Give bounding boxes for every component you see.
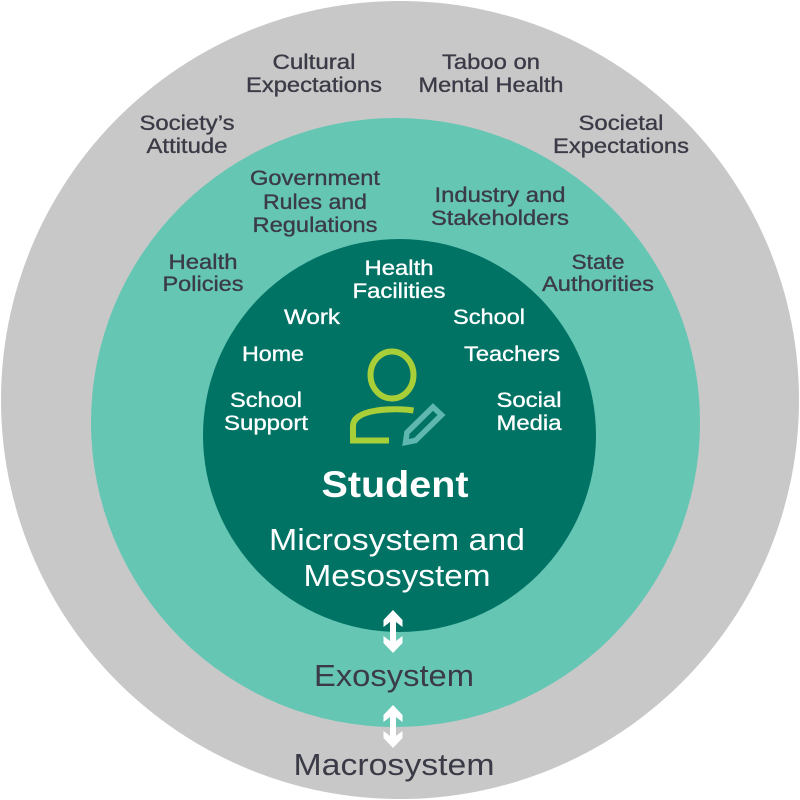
label: Cultural Expectations: [246, 51, 382, 97]
label: Societal Expectations: [553, 112, 689, 158]
label: Societal Expectations: Societal: [578, 112, 664, 135]
label: Taboo on Mental Health: Taboo on: [442, 51, 540, 74]
label: Social Media: Social: [496, 389, 562, 412]
arrow: micro to exo: [384, 610, 402, 653]
label: School Support: [224, 389, 308, 435]
label: State Authorities: Authorities: [542, 273, 654, 296]
heading: Microsystem and Mesosystem: Mesosystem: [304, 558, 490, 593]
label: Health Facilities: Health: [364, 257, 434, 280]
label: Societal Expectations: Expectations: [553, 135, 689, 158]
label: Society's Attitude: Society’s: [140, 112, 234, 135]
heading: Microsystem and Mesosystem: [269, 522, 525, 593]
icon: student shoulders: [353, 409, 414, 440]
label: Taboo on Mental Health: [418, 51, 564, 97]
heading: Exosystem: Exosystem: [314, 658, 474, 693]
heading: Macrosystem: Macrosystem: [294, 747, 494, 782]
label: Government Rules and Regulations: Regulations: [252, 214, 378, 237]
label: Home: Home: [242, 343, 304, 366]
label: School Support: Support: [224, 412, 308, 435]
label: Government Rules and Regulations: Government: [250, 167, 380, 190]
heading: Microsystem and Mesosystem: Microsystem and: [269, 522, 525, 557]
label: Teachers: Teachers: [464, 343, 560, 366]
label: State Authorities: State: [572, 251, 624, 274]
label: Cultural Expectations: Cultural: [272, 51, 356, 74]
panel: microsystem and mesosystem circle: [203, 239, 596, 632]
heading: Student: Student: [322, 464, 468, 505]
label: Society's Attitude: Attitude: [146, 135, 228, 158]
label: Social Media: [496, 389, 562, 435]
label: Cultural Expectations: Expectations: [246, 74, 382, 97]
label: School Support: School: [230, 389, 302, 412]
label: Health Facilities: Facilities: [352, 280, 446, 303]
label: Taboo on Mental Health: Mental Health: [418, 74, 564, 97]
macrosystem labels: [140, 51, 689, 158]
label: Health Facilities: [352, 257, 446, 303]
label: Health Policies: Health: [168, 251, 238, 274]
label: Industry and Stakeholders: Industry and: [434, 184, 566, 207]
label: Health Policies: [162, 251, 244, 296]
label: Society's Attitude: [140, 112, 234, 158]
label: Work: Work: [284, 306, 341, 329]
label: School: School: [453, 306, 525, 329]
exosystem labels: [162, 167, 654, 296]
icon: pencil: [406, 407, 442, 442]
label: State Authorities: [542, 251, 654, 296]
label: Health Policies: Policies: [162, 273, 244, 296]
label: Government Rules and Regulations: [250, 167, 380, 237]
icon: student with pencil: [353, 352, 442, 442]
label: Industry and Stakeholders: [431, 184, 569, 230]
label: Government Rules and Regulations: Rules and: [263, 191, 367, 214]
label: Social Media: Media: [496, 412, 562, 435]
label: Industry and Stakeholders: Stakeholders: [431, 207, 569, 230]
arrow: exo to macro: [384, 705, 402, 748]
panel: exosystem circle: [91, 118, 700, 727]
microsystem labels: [224, 257, 562, 435]
icon: student head: [370, 352, 414, 398]
